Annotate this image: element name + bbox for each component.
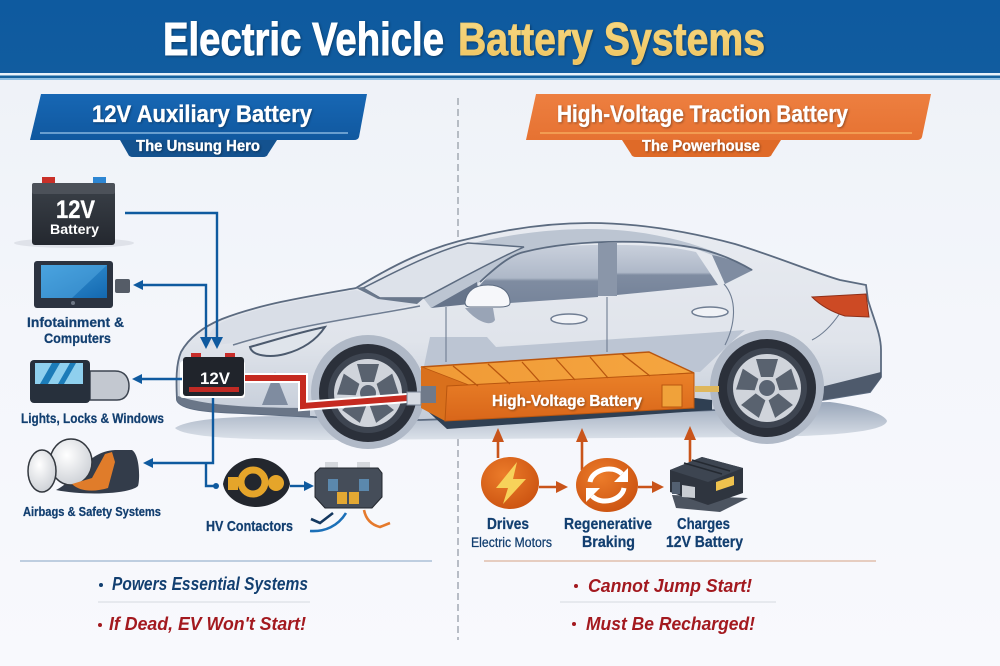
rear link [695,386,719,392]
label: drives electric motors [471,516,552,550]
front side window [480,245,598,305]
panel heading: high-voltage traction battery: The Powerhouse [642,138,760,155]
hood crease [233,306,420,345]
car body [176,223,881,420]
icon: HV contactors [315,462,382,508]
front bumper lower trim [177,396,310,417]
icon: infotainment screen [34,261,130,308]
blue arrowheads [132,280,314,491]
lower door shading [424,330,745,372]
label: HV contactors: HV Contactors [206,518,293,535]
left bottom rule [20,560,432,562]
label: drives electric motors: Electric Motors [471,535,552,550]
panel heading: high-voltage traction battery: High-Voltage Traction Battery [557,101,849,128]
label: charges 12V battery: Charges [677,516,730,533]
window pillar [598,243,617,296]
label: regenerative braking: Regenerative [564,516,652,533]
car [175,223,887,449]
icon: regenerative braking [576,458,638,512]
quarter window [712,255,753,284]
front grille [262,372,288,405]
centre dashed divider [457,98,459,640]
header band [0,0,1000,80]
icon: contactor action arrows [310,510,390,531]
door seams [446,284,840,362]
icon: airbags and seat [28,439,139,493]
door handles [551,307,728,324]
pack base [421,398,712,429]
car ground shadow [175,402,887,440]
label: infotainment: Infotainment & [27,314,124,330]
label: drives electric motors: Drives [487,516,529,533]
red high-voltage cable [244,378,436,406]
label: regenerative braking: Braking [582,534,635,551]
label: airbags: Airbags & Safety Systems [23,504,161,519]
small 12V battery under hood [180,353,245,398]
right takeaways [560,576,776,634]
title: Battery Systems [458,13,765,65]
icon: HV control module [223,458,290,507]
panel heading: 12V auxiliary battery [30,94,367,157]
pack top [421,352,694,387]
pack left side [421,367,473,421]
pack front [445,373,694,421]
left takeaways: Powers Essential Systems [112,574,308,594]
rear bumper trim [821,372,881,400]
panel heading: 12V auxiliary battery: 12V Auxiliary Battery [92,101,313,128]
windshield [363,243,524,298]
title [163,13,765,65]
cowl [356,287,424,304]
front wheel [311,335,425,449]
right takeaways: Cannot Jump Start! [588,576,752,596]
high-voltage battery pack [421,352,719,429]
label: charges 12V battery [666,516,743,551]
right takeaways: Must Be Recharged! [586,614,755,634]
label: infotainment: Computers [44,330,111,346]
left takeaways: If Dead, EV Won't Start! [109,614,306,634]
title: Electric Vehicle [163,13,444,65]
tail light [812,294,869,317]
cell seams [453,354,650,386]
headlight [250,327,325,356]
icon: lights, locks and windows [30,360,129,403]
label: infotainment [27,314,124,346]
side mirror [465,285,510,323]
panel heading: high-voltage traction battery [526,94,931,157]
icon: 12V battery: Battery [50,221,99,237]
orange up arrows and flow [492,426,696,493]
icon: DC-DC charger [670,457,748,512]
label: lights: Lights, Locks & Windows [21,410,164,426]
right bottom rule [484,560,876,562]
pack terminal [662,385,682,407]
roof band [424,229,752,308]
left takeaways [98,574,310,634]
label: charges 12V battery: 12V Battery [666,534,743,551]
label: regenerative braking [564,516,652,551]
hood panel [208,290,417,346]
panel heading: 12V auxiliary battery: The Unsung Hero [136,138,260,155]
pack label: High-Voltage Battery [492,393,642,410]
icon: 12V battery [14,177,134,248]
small 12V battery under hood: 12V [200,369,231,388]
blue wiring [125,213,306,486]
A-pillar [431,282,480,308]
window surround [480,242,752,282]
rear wheel [710,330,824,444]
rear side window [617,245,718,295]
icon: electric motor bolt [481,457,539,509]
icon: 12V battery: 12V [56,196,95,224]
